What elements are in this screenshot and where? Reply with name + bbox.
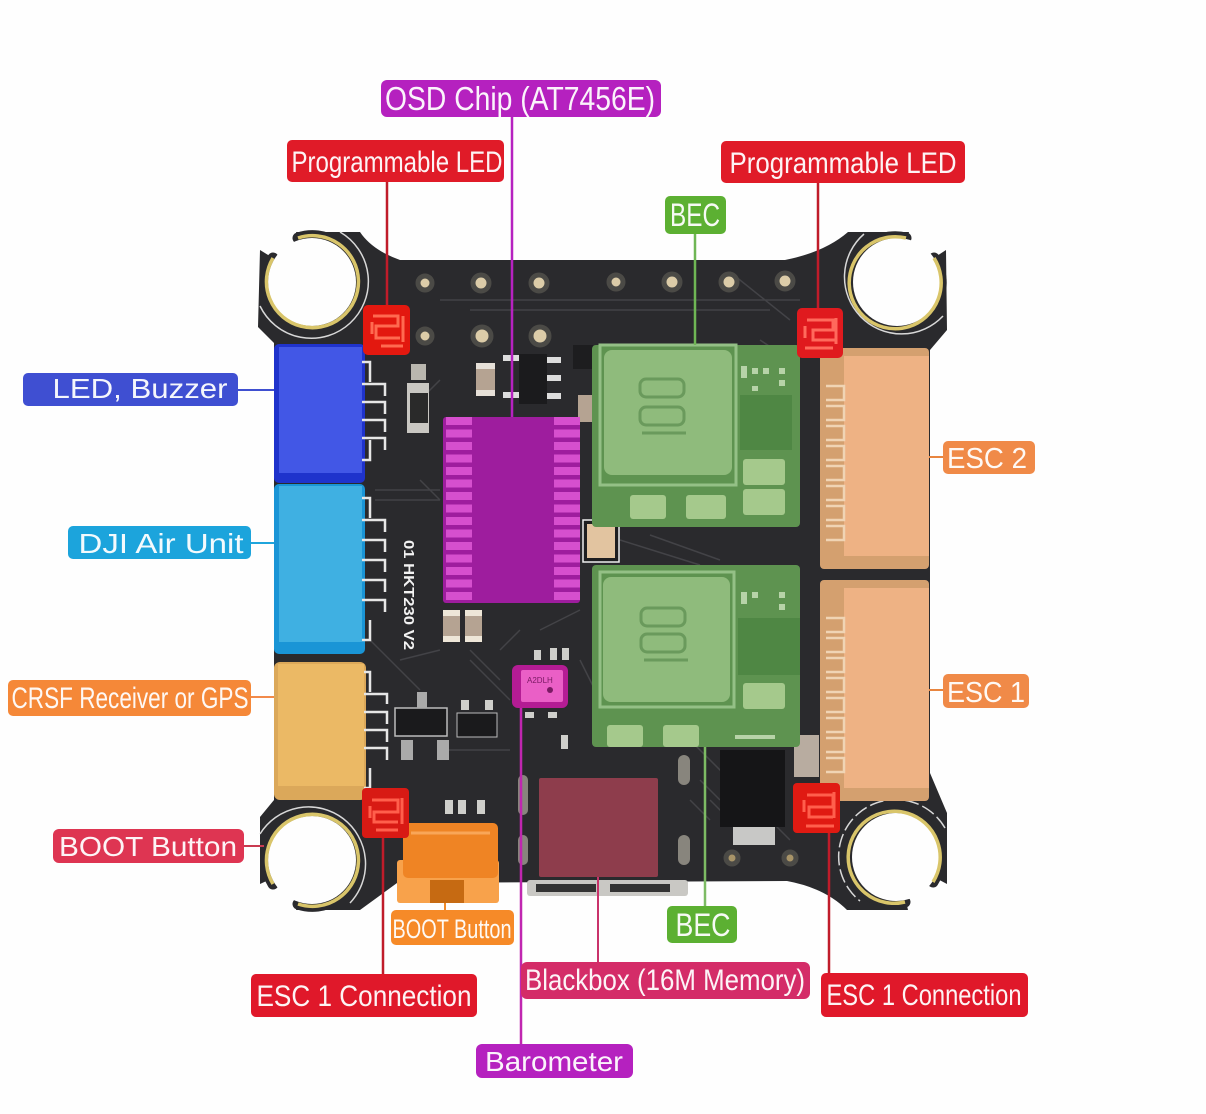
LED marker: bottom right xyxy=(793,783,840,833)
mounting hole: bottom left xyxy=(260,807,366,906)
mounting hole: top right xyxy=(844,234,943,334)
label: DJI Air Unit: DJI Air Unit xyxy=(78,528,244,559)
board silkscreen text: 01 HKT230 V2 xyxy=(400,540,417,650)
label: ESC 2: ESC 2 xyxy=(947,443,1027,475)
leader line: ESC 1 connection left xyxy=(382,838,384,974)
solder pads xyxy=(418,273,796,864)
label: OSD Chip: OSD Chip (AT7456E) xyxy=(385,80,655,117)
mounting hole: top left xyxy=(260,232,368,338)
leader line: CRSF xyxy=(250,696,274,698)
leader line: OSD chip xyxy=(511,117,513,417)
leader line: ESC 1 xyxy=(929,689,943,691)
connector: LED and buzzer (blue) xyxy=(274,344,385,483)
label: BOOT Button left: BOOT Button xyxy=(59,831,237,862)
connector: DJI Air Unit (cyan) xyxy=(274,484,385,654)
OSD chip xyxy=(443,417,580,603)
label: ESC 1 Connection left: ESC 1 Connection xyxy=(256,980,472,1013)
leader line: ESC 2 xyxy=(929,456,943,458)
blackbox memory chip xyxy=(539,778,658,877)
label: BOOT Button small: BOOT Button xyxy=(392,914,512,944)
label: Barometer: Barometer xyxy=(485,1046,623,1077)
label: Blackbox 16M Memory: Blackbox (16M Memory) xyxy=(525,964,805,997)
leader line: programmable LED left xyxy=(386,182,388,305)
connector: CRSF receiver or GPS (yellow) xyxy=(274,662,387,800)
small components xyxy=(395,345,819,865)
leader line: programmable LED right xyxy=(817,183,819,308)
leader line: BOOT button small xyxy=(444,903,446,910)
label: ESC 1 Connection right: ESC 1 Connection xyxy=(826,979,1022,1012)
leader line: BEC top xyxy=(694,233,696,345)
label: BEC top: BEC xyxy=(670,197,720,233)
barometer chip xyxy=(512,665,568,708)
circuit board xyxy=(258,232,947,910)
label: ESC 1: ESC 1 xyxy=(947,677,1025,709)
leader line: DJI Air Unit xyxy=(251,542,274,544)
leader line: LED buzzer xyxy=(237,389,274,391)
label: ESC 1 Connection right xyxy=(821,973,1028,1017)
leader line: barometer xyxy=(520,708,522,1044)
label: BOOT Button small xyxy=(391,910,514,945)
LED marker: bottom left xyxy=(362,788,409,838)
label: BEC bottom: BEC xyxy=(676,907,730,943)
label: Programmable LED right: Programmable LED xyxy=(730,147,956,180)
label: ESC 1 Connection left xyxy=(251,974,477,1017)
BOOT button xyxy=(397,823,499,903)
leader line: BEC bottom xyxy=(704,747,706,906)
LED marker: top left xyxy=(363,305,410,355)
USB port xyxy=(527,880,688,896)
mounting hole: bottom right xyxy=(839,800,945,903)
connector: ESC 1 (tan) xyxy=(820,580,929,801)
leader line: BOOT button left xyxy=(244,845,264,847)
label: CRSF Receiver or GPS: CRSF Receiver or GPS xyxy=(12,682,248,715)
BEC module bottom xyxy=(592,565,800,747)
leader line: ESC 1 connection right xyxy=(828,833,830,974)
LED marker: top right xyxy=(797,308,843,358)
label: LED, Buzzer xyxy=(23,373,238,406)
leader line: blackbox xyxy=(597,877,599,962)
connector: ESC 2 (tan) xyxy=(820,348,929,569)
label: Programmable LED left xyxy=(287,140,504,182)
barometer chip: A2DLH xyxy=(527,676,553,685)
BEC module top xyxy=(592,345,800,527)
label: Programmable LED right xyxy=(721,141,965,183)
label: LED, Buzzer: LED, Buzzer xyxy=(52,373,228,404)
label: Programmable LED left: Programmable LED xyxy=(292,146,502,179)
